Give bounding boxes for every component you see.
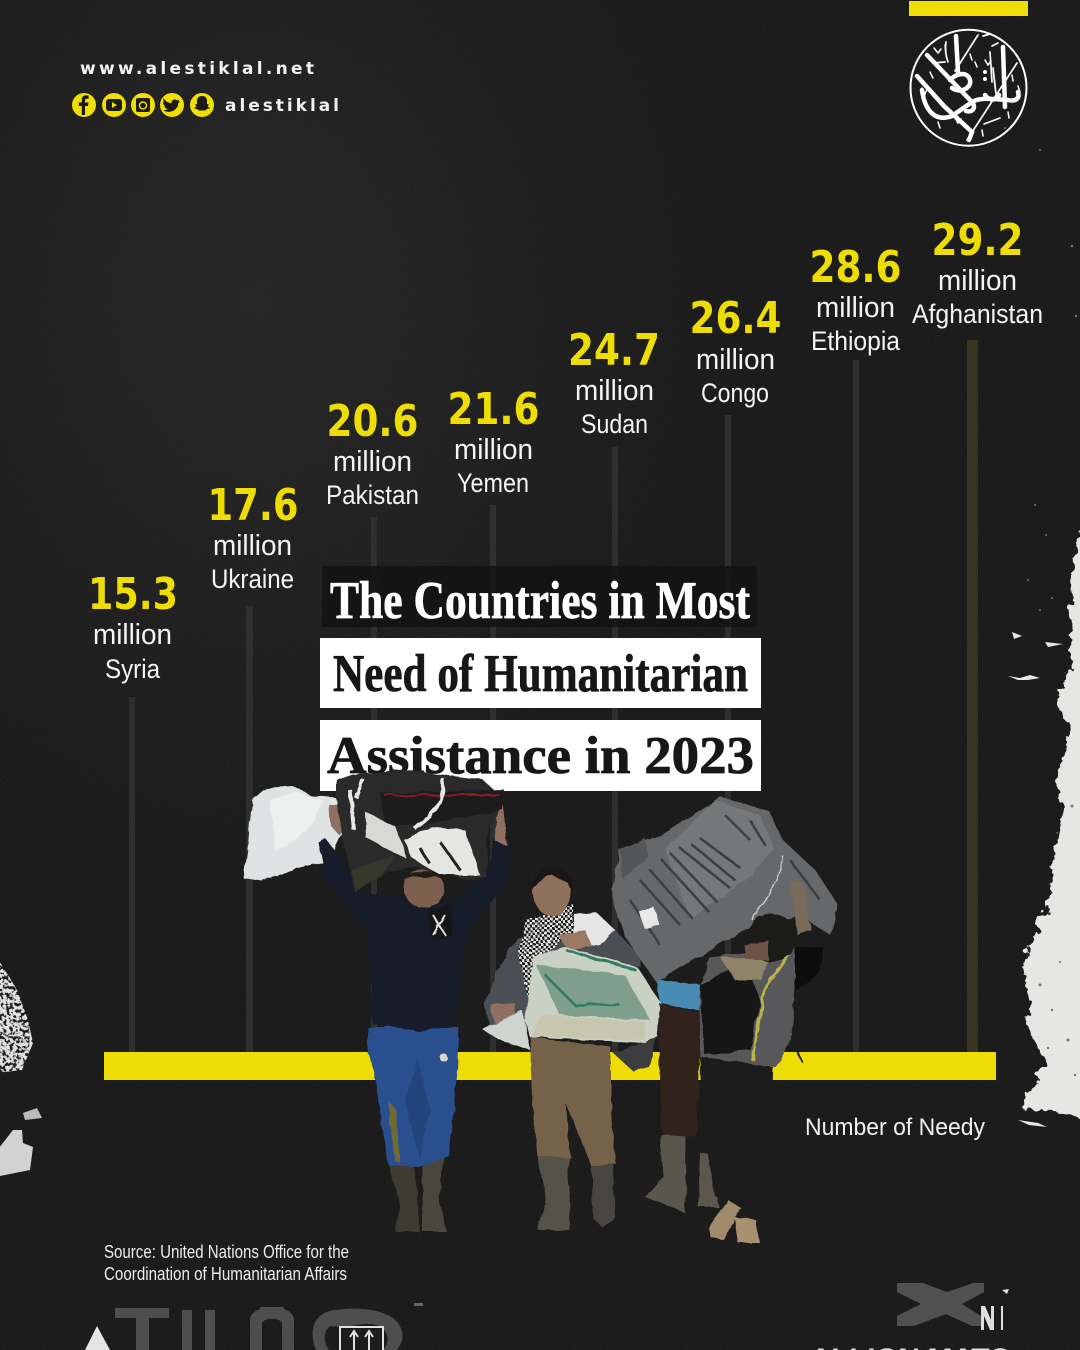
label: Sudan: 24.7 (568, 325, 660, 376)
label: Sudan: Sudan (581, 409, 648, 439)
torn paper edge: left (0, 955, 42, 1177)
label: Pakistan (326, 396, 419, 510)
label: Congo: Congo (701, 378, 769, 408)
label: Pakistan: Pakistan (326, 480, 419, 510)
label: Ukraine (208, 480, 298, 594)
figure: left man with bags on head (243, 770, 511, 1232)
label: Afghanistan: 29.2 (932, 215, 1024, 266)
label: Afghanistan: million (938, 265, 1017, 297)
bar: Congo (725, 415, 731, 1052)
label: Syria: 15.3 (88, 569, 178, 620)
source note: Coordination of Humanitarian Affairs (104, 1264, 347, 1284)
source note: Source: United Nations Office for the (104, 1242, 349, 1262)
icon: instagram (131, 93, 155, 117)
label: Sudan (568, 325, 660, 439)
label: Pakistan: million (333, 446, 412, 478)
icon: snapchat (190, 93, 214, 117)
bar: Ukraine (246, 606, 253, 1052)
label: Yemen: Yemen (457, 468, 529, 498)
social media icons (72, 93, 214, 117)
icon: twitter (160, 93, 184, 117)
bar chart: number of needy by country (88, 215, 1043, 1141)
source note (104, 1242, 349, 1284)
label: Ethiopia: Ethiopia (811, 326, 901, 356)
faded stamp lettering: bottom left (85, 1303, 423, 1350)
label: Ukraine: 17.6 (208, 480, 298, 531)
faded stamp lettering: bottom right (810, 1283, 1012, 1350)
bar: Ethiopia (853, 360, 859, 1052)
label: Yemen (448, 384, 540, 498)
website address: www.alestiklal.net (80, 59, 314, 79)
title line 2: Need of Humanitarian (333, 645, 748, 703)
baseline bar (104, 1052, 996, 1080)
bar: Syria (129, 697, 135, 1052)
bar: Sudan (612, 447, 618, 1052)
icon: facebook (72, 93, 96, 117)
label: Ethiopia: 28.6 (810, 242, 902, 293)
figure: front man with blankets (613, 797, 838, 1243)
social handle: alestiklal (225, 96, 339, 116)
label: Ethiopia (810, 242, 902, 356)
label: Afghanistan (912, 215, 1043, 329)
label: Congo: million (696, 344, 775, 376)
label: Congo (690, 293, 782, 408)
label: Ukraine: Ukraine (211, 564, 294, 594)
bar: Afghanistan (967, 340, 978, 1052)
title line 3: Assistance in 2023 (327, 727, 754, 785)
label: Syria: Syria (105, 654, 161, 684)
torn paper edge: right (1004, 127, 1080, 1127)
top accent bar (909, 1, 1028, 16)
title line 1: The Countries in Most (330, 572, 750, 630)
label: Sudan: million (575, 375, 654, 407)
label: Syria (88, 569, 178, 684)
figure: middle man with white bag (483, 867, 661, 1230)
label: Afghanistan: Afghanistan (912, 299, 1043, 329)
bar: Pakistan (371, 517, 377, 1052)
logo: calligraphy roundel (910, 30, 1026, 146)
bar: Yemen (490, 505, 496, 1052)
label: Ukraine: million (213, 530, 292, 562)
label: Congo: 26.4 (690, 293, 782, 344)
label: Yemen: 21.6 (448, 384, 540, 435)
photo: three men carrying aid (243, 770, 838, 1243)
label: Syria: million (93, 619, 172, 651)
icon: youtube (102, 93, 126, 117)
label: Ethiopia: million (816, 292, 895, 324)
figure: back man with blankets (645, 980, 718, 1213)
title (320, 566, 761, 791)
label: Yemen: million (454, 434, 533, 466)
axis label: Number of Needy (805, 1114, 985, 1141)
title line 2 (320, 638, 761, 708)
label: Pakistan: 20.6 (326, 396, 418, 447)
